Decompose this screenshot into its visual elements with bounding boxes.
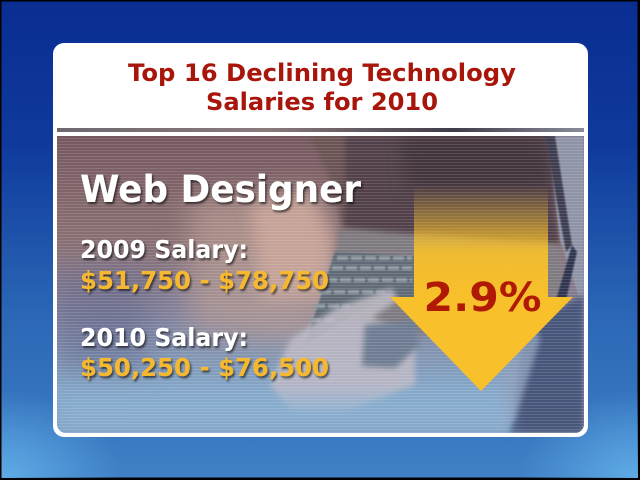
person's face [250, 195, 335, 300]
arrow: decline indicator [390, 185, 573, 391]
divider band [57, 128, 584, 132]
title [128, 59, 516, 116]
hair [314, 137, 348, 230]
panel: white card [53, 43, 588, 437]
2010 salary [80, 323, 329, 382]
left cool shading [57, 270, 147, 370]
laptop deck [325, 228, 566, 340]
title: Top 16 Declining Technology [128, 59, 516, 87]
bottom glow [57, 395, 510, 433]
2009 salary: $51,750 - $78,750 [80, 266, 329, 295]
panel: photo of person at laptop [57, 136, 584, 433]
dark lower right [510, 295, 584, 433]
keyboard [310, 252, 414, 333]
hand and forearm [270, 288, 415, 410]
right laptop edge [548, 136, 584, 433]
job heading: Web Designer [80, 168, 362, 211]
shadow between fingers [362, 320, 420, 368]
warm cheek glow [190, 190, 345, 345]
2009 salary [80, 235, 329, 295]
scan line texture [57, 136, 584, 433]
2010 salary: 2010 Salary: [80, 323, 248, 352]
percent decline: 2.9% [424, 275, 542, 321]
laptop screen [345, 136, 560, 245]
2010 salary: $50,250 - $76,500 [80, 353, 329, 382]
title: Salaries for 2010 [206, 88, 438, 116]
2009 salary: 2009 Salary: [80, 235, 248, 264]
